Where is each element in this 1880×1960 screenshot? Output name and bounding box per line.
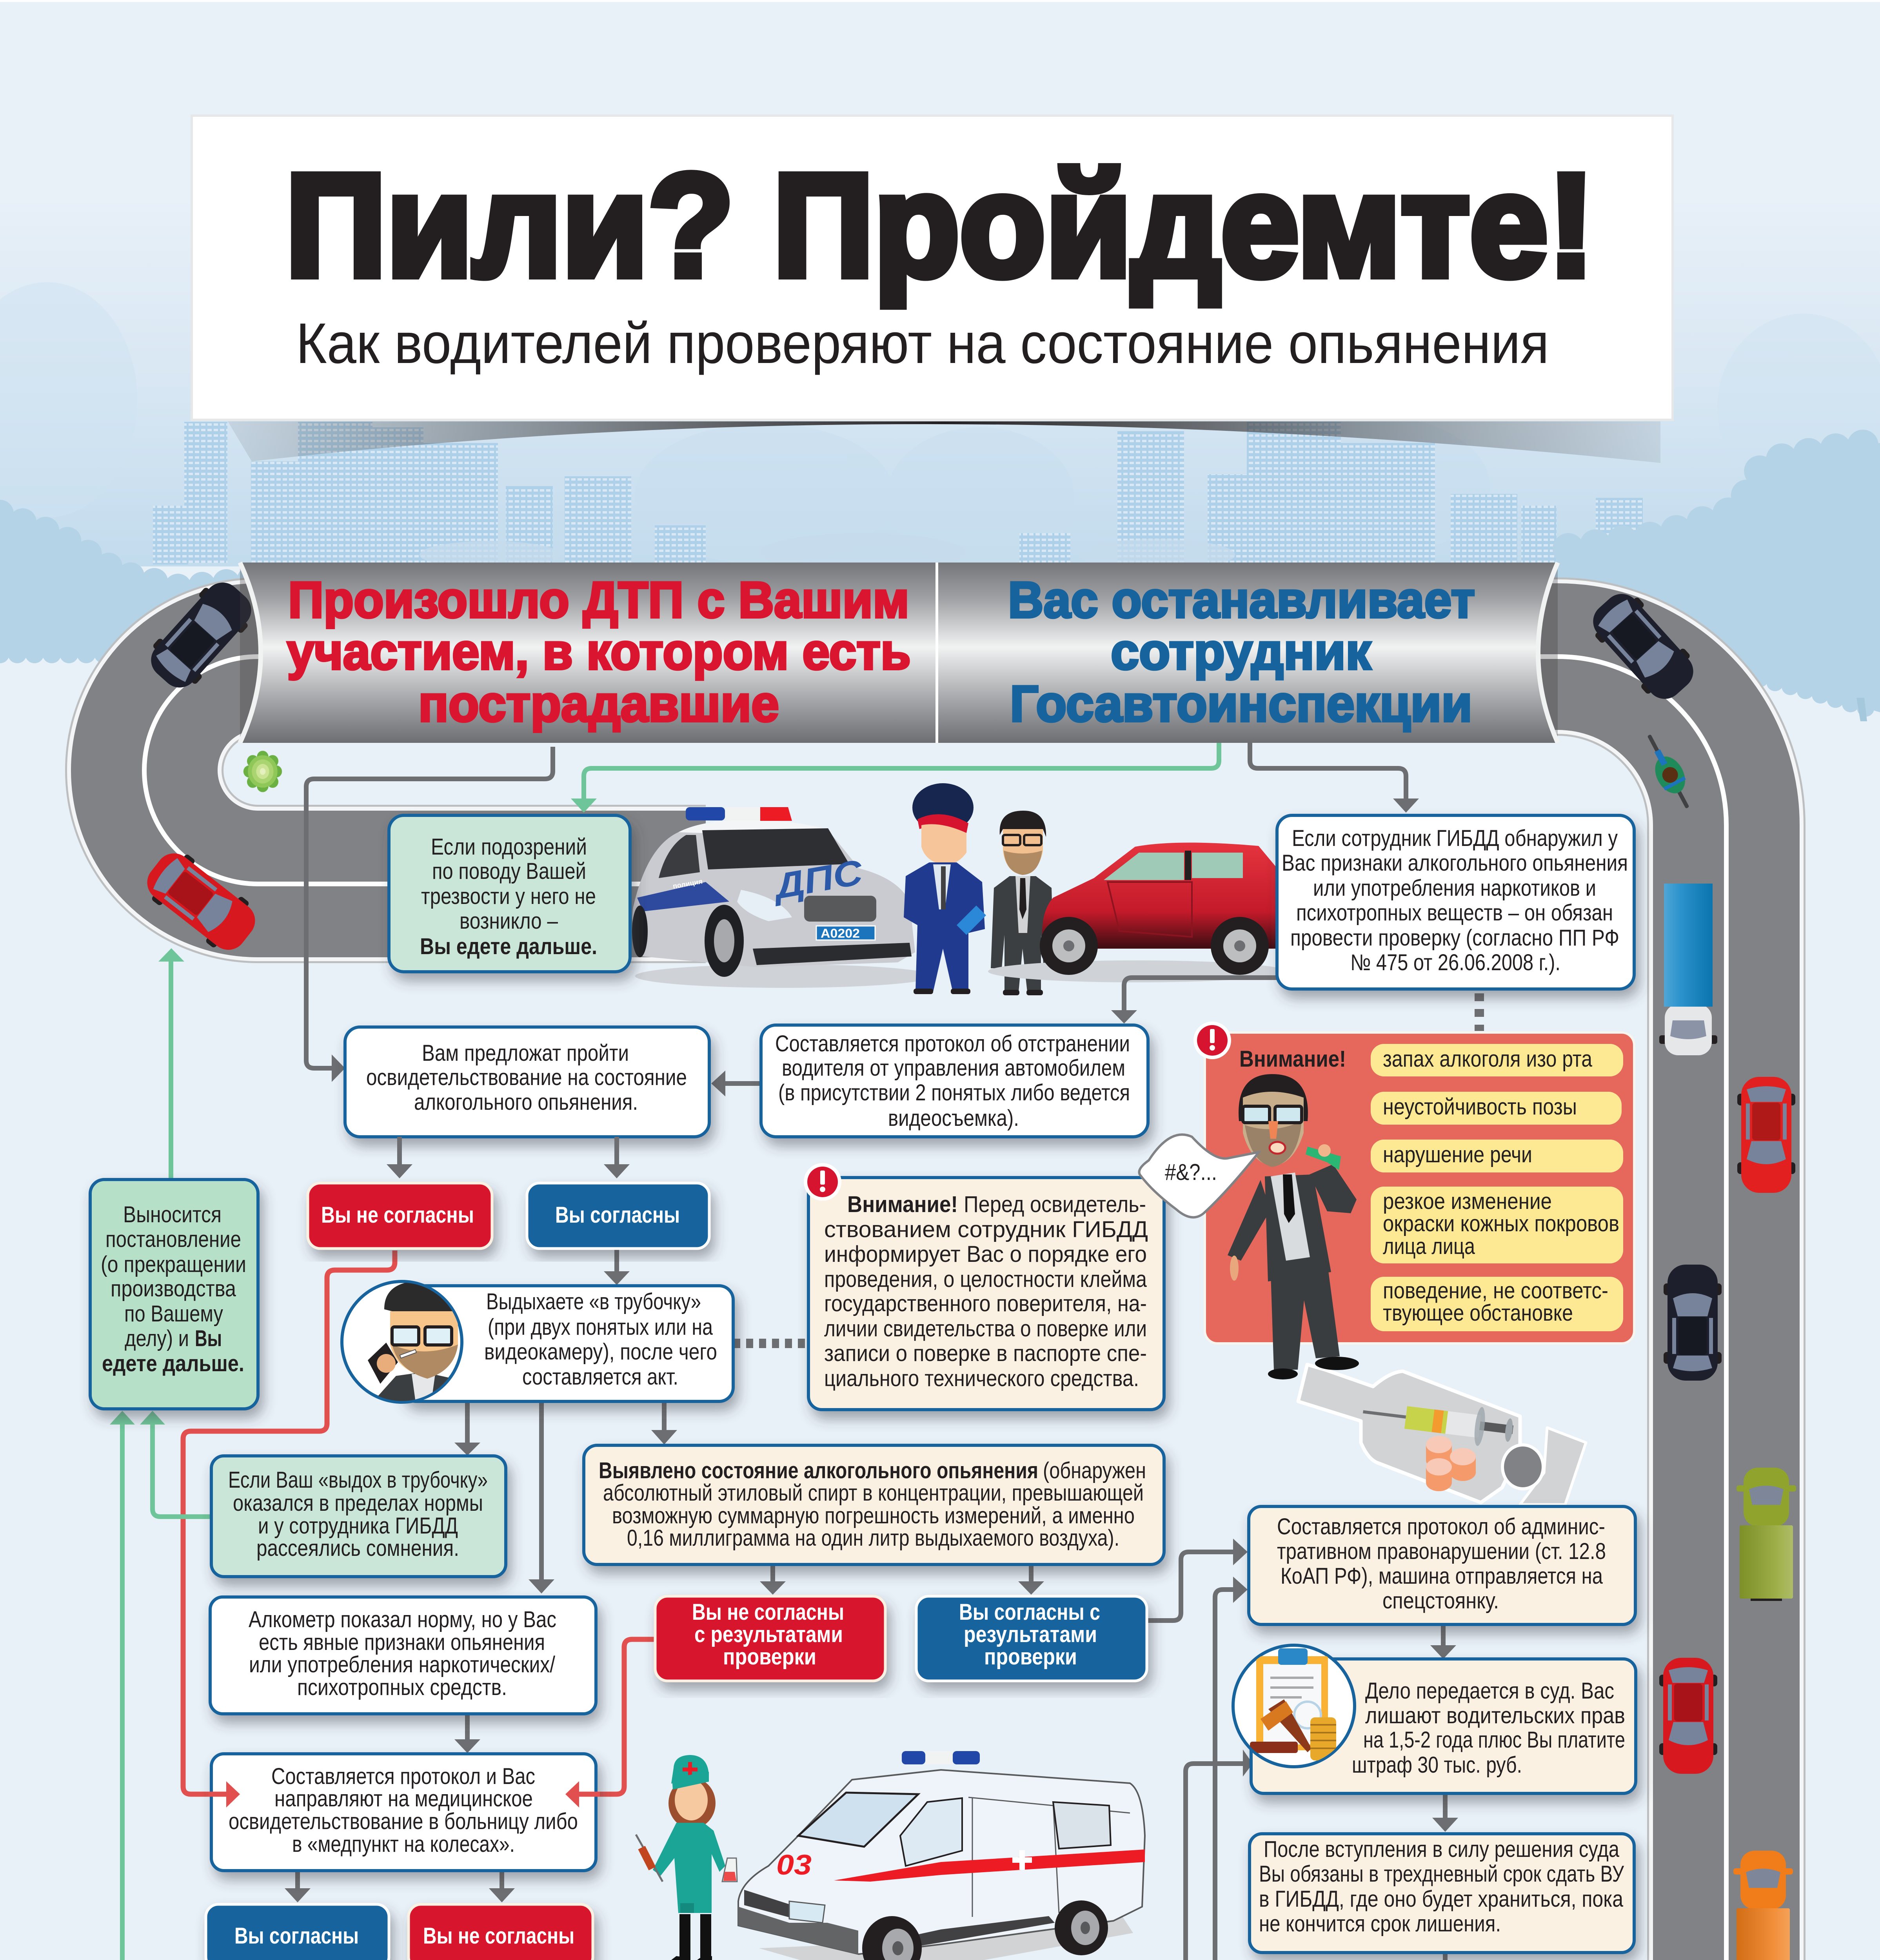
arrow: court to after decision: [1432, 1793, 1458, 1832]
arrow: refusal protocol to court: [732, 1749, 1253, 1960]
box: no suspicion: Если подозрений: [431, 834, 587, 860]
box: alcometer: Алкометр показал норму, но у Вас: [249, 1607, 556, 1632]
box: offer test: освидетельствование на состояние: [366, 1065, 687, 1090]
button: accept results: результатами: [964, 1622, 1097, 1647]
box: doubts: оказался в пределах нормы: [233, 1490, 483, 1516]
box: medical referral: [211, 1754, 596, 1871]
box: medical referral: в «медпункт на колесах».: [292, 1831, 515, 1857]
pill: posture: [1371, 1092, 1622, 1125]
arrow: detected to accept result: [1018, 1564, 1044, 1595]
box: alcometer: или употребления наркотических/: [249, 1652, 556, 1677]
box: attention before test: государственного поверителя, на-: [824, 1291, 1147, 1316]
box: offer test: алкогольного опьянения.: [414, 1089, 638, 1115]
box: attention before test: проведения, о целостности клейма: [824, 1267, 1147, 1292]
box: breath test: видеокамеру), после чего: [484, 1339, 717, 1365]
cars on road: [138, 572, 1796, 1960]
arrow: doubts to decision: [140, 1411, 211, 1517]
box: signs found: [1277, 815, 1634, 989]
box: removal protocol: водителя от управления автомобилем: [782, 1055, 1125, 1081]
illustration: bottle: [1298, 1365, 1586, 1504]
box: alcometer: есть явные признаки опьянения: [259, 1630, 545, 1655]
truck: orange: [1733, 1851, 1793, 1960]
heading: inspector stop: [1008, 571, 1475, 732]
title card: [192, 116, 1673, 420]
box: after decision: в ГИБДД, где оно будет храниться, пока: [1259, 1886, 1624, 1912]
box: removal protocol: видеосъемка).: [888, 1105, 1019, 1131]
illustration: ambulance: 03: [776, 1849, 812, 1881]
heading: accident: Произошло ДТП с Вашим: [288, 571, 909, 628]
button: refuse results: Вы не согласны: [692, 1599, 844, 1625]
arrow: inspector to no suspicion: [571, 743, 1219, 813]
box: after decision: [1250, 1834, 1634, 1953]
box: no suspicion: по поводу Вашей: [432, 858, 586, 884]
button: refuse results: проверки: [723, 1644, 816, 1670]
box: signs found: провести проверку (согласно ПП РФ: [1290, 925, 1619, 951]
icon: man with breathalyzer: [342, 1281, 463, 1402]
box: doubts: рассеялись сомнения.: [256, 1535, 459, 1561]
civilian man: [991, 811, 1054, 995]
box: no suspicion: трезвости у него не: [421, 884, 596, 909]
box: signs found: психотропных веществ – он обязан: [1296, 900, 1613, 926]
heading: inspector stop: Госавтоинспекции: [1010, 675, 1472, 732]
box: doubts: [211, 1456, 506, 1577]
pill: skin: резкое изменение: [1383, 1189, 1552, 1214]
box: court: [1233, 1645, 1636, 1793]
dotted connector: signs to attention: [1475, 993, 1484, 1031]
arrow: medical to agree: [285, 1871, 311, 1902]
arrow: disagree to medical protocol: [183, 1250, 395, 1808]
box: admin protocol: спецстоянку.: [1382, 1588, 1499, 1613]
red arrow tips over box: [208, 1781, 600, 1808]
police car: полиция: [672, 877, 703, 890]
box: after decision: не кончится срок лишения.: [1259, 1911, 1501, 1936]
button: disagree: [308, 1183, 492, 1249]
button: accept results: [916, 1596, 1147, 1681]
cyclist right: [1637, 729, 1699, 814]
button: agree: Вы согласны: [555, 1202, 680, 1228]
button: agree: [527, 1183, 709, 1249]
box: doubts: Если Ваш «выдох в трубочку»: [228, 1467, 488, 1493]
box: attention before test: Перед освидетель-: [964, 1192, 1146, 1217]
box: breath test: [342, 1281, 733, 1402]
box: removal protocol: (в присутствии 2 понятых либо ведется: [778, 1080, 1130, 1105]
car: red lane right: [1737, 1077, 1795, 1193]
box: court: лишают водительских прав: [1365, 1703, 1625, 1728]
box: no suspicion: Вы едете дальше.: [420, 934, 597, 959]
box: intoxication detected: возможную суммарную погрешность измерений, а именно: [612, 1503, 1135, 1528]
police car: А0202: [821, 926, 860, 940]
button: refuse results: [655, 1596, 885, 1681]
trees left: [0, 514, 251, 655]
box: attention before test: записи о поверке в паспорте спе-: [824, 1341, 1147, 1366]
title card shadow: [228, 421, 1660, 463]
car: red lane left: [1659, 1658, 1717, 1774]
box: medical referral: Составляется протокол и Вас: [271, 1764, 535, 1789]
box: offer test: [345, 1027, 709, 1137]
illustration: nurse: [636, 1755, 737, 1960]
arrow: breath to detected: [651, 1401, 677, 1445]
button: accept results: Вы согласны с: [959, 1599, 1100, 1625]
panel: signs of intoxication: Внимание!: [1239, 1046, 1346, 1072]
heading: accident: участием, в котором есть: [287, 623, 911, 680]
police car: ДПС: [768, 853, 866, 907]
pills: [1426, 1436, 1476, 1491]
pill: skin: [1371, 1187, 1623, 1263]
box: court: Дело передается в суд. Вас: [1365, 1678, 1614, 1704]
heading: accident: пострадавшие: [418, 675, 779, 732]
tube header: [240, 563, 1558, 743]
car: dark top left: [141, 572, 262, 698]
clouds and skyline: [0, 282, 1880, 572]
arrow: protocol to offer: [711, 1071, 761, 1096]
heading: accident: [287, 571, 911, 732]
box: attention before test: личии свидетельства о поверке или: [824, 1316, 1147, 1341]
box: court: на 1,5-2 года плюс Вы платите: [1363, 1727, 1625, 1753]
button: disagree medical: Вы не согласны: [423, 1923, 574, 1949]
speech bubble: [1139, 1134, 1259, 1217]
box: decision: Выносится: [123, 1202, 222, 1227]
box: offer test: Вам предложат пройти: [422, 1040, 629, 1066]
box: admin protocol: тративном правонарушении (ст. 12.8: [1277, 1539, 1606, 1564]
pill: behaviour: твующее обстановке: [1383, 1300, 1573, 1326]
road: [144, 657, 1726, 1960]
arrow: admin protocol to court: [1430, 1624, 1456, 1659]
car: red left: [138, 843, 265, 960]
arrow: agree to breath: [604, 1249, 630, 1285]
box: decision: (о прекращении: [101, 1252, 246, 1277]
box: attention before test: циального технического средства.: [824, 1366, 1139, 1391]
arrow: breath to alcometer: [529, 1401, 554, 1593]
arrow: alcometer to medical: [454, 1714, 480, 1753]
truck: green: [1737, 1468, 1796, 1601]
arrow: retest refusal to medical protocol: [565, 1639, 654, 1808]
pill: smell: запах алкоголя изо рта: [1383, 1046, 1593, 1072]
box: no suspicion: возникло –: [460, 908, 558, 934]
arrow: med result to admin protocol: [576, 1577, 1248, 1960]
box: court: штраф 30 тыс. руб.: [1352, 1752, 1522, 1778]
button: disagree: Вы не согласны: [321, 1202, 474, 1228]
arrow: decision to road (green up): [158, 948, 184, 1180]
panel: signs of intoxication: [1193, 1022, 1634, 1343]
box: attention before test: информирует Вас о порядке его: [824, 1241, 1147, 1267]
box: doubts: и у сотрудника ГИБДД: [258, 1513, 458, 1539]
icon: exclamation: [1193, 1022, 1231, 1059]
box: decision: едете дальше.: [102, 1351, 244, 1376]
box: decision: Вы: [195, 1326, 222, 1351]
arrow: signs to protocol: [1111, 978, 1277, 1024]
pill: behaviour: [1371, 1277, 1623, 1331]
button: refuse results: с результатами: [694, 1622, 843, 1647]
arrow: offer to agree: [604, 1137, 630, 1178]
box: signs found: Вас признаки алкогольного опьянения: [1282, 850, 1628, 876]
button: agree medical: Вы согласны: [234, 1923, 359, 1949]
trees right: [1553, 443, 1880, 721]
box: alcometer: психотропных средств.: [297, 1675, 507, 1700]
police car: [632, 807, 933, 988]
box: after decision: Вы обязаны в трехдневный срок сдать ВУ: [1259, 1861, 1624, 1887]
heading: inspector stop: Вас останавливает: [1008, 571, 1475, 628]
arrow: breath to norm: [454, 1401, 480, 1455]
arrow: norm check to decision: [110, 1411, 135, 1960]
box: admin protocol: КоАП РФ), машина отправляется на: [1281, 1563, 1603, 1589]
box: decision: производства: [111, 1276, 236, 1301]
box: intoxication detected: 0,16 миллиграмма на один литр выдыхаемого воздуха).: [627, 1525, 1119, 1551]
box: intoxication detected: (обнаружен: [1043, 1458, 1146, 1483]
box: medical referral: направляют на медицинское: [274, 1786, 533, 1811]
box: intoxication detected: Выявлено состояние алкогольного опьянения: [599, 1458, 1038, 1483]
speech bubble: #&?...: [1165, 1160, 1217, 1185]
box: signs found: Если сотрудник ГИБДД обнаружил у: [1292, 826, 1618, 851]
box: decision: постановление: [105, 1227, 241, 1252]
pill: skin: лица лица: [1383, 1234, 1475, 1259]
pill: speech: [1371, 1140, 1623, 1172]
syringe: [1361, 1393, 1515, 1450]
arrow: offer to disagree: [387, 1137, 412, 1178]
illustration: drunk man: [1228, 1074, 1359, 1379]
subtitle: Как водителей проверяют на состояние опьянения: [296, 311, 1549, 375]
box: decision: делу) и: [125, 1326, 189, 1351]
arrow: inspector to signs: [1250, 743, 1419, 813]
box: attention before test: ствованием сотрудник ГИБДД: [824, 1217, 1148, 1242]
title: Пили? Пройдемте!: [285, 143, 1595, 307]
heading: inspector stop: сотрудник: [1111, 623, 1371, 680]
box: no suspicion: [389, 815, 630, 972]
button: agree medical: [206, 1904, 389, 1960]
box: admin protocol: Составляется протокол об админис-: [1277, 1514, 1605, 1539]
pill: speech: нарушение речи: [1383, 1142, 1532, 1167]
pill: skin: окраски кожных покровов: [1383, 1211, 1619, 1236]
car: dark top right: [1583, 584, 1704, 709]
arrow: accident to offer: [306, 747, 553, 1082]
icon: exclamation: [804, 1163, 841, 1201]
button: disagree medical: [409, 1904, 593, 1960]
pill: posture: неустойчивость позы: [1383, 1094, 1577, 1120]
box: decision: [90, 1180, 258, 1409]
truck: blue vertical: [1659, 884, 1717, 1055]
dotted connector: breath to attention: [733, 1339, 807, 1348]
small bushes: [243, 751, 1025, 1960]
box: intoxication detected: абсолютный этиловый спирт в концентрации, превышающей: [603, 1480, 1144, 1506]
arrow: medical to disagree: [489, 1871, 515, 1902]
box: after decision: После вступления в силу решения суда: [1264, 1837, 1620, 1862]
button: accept results: проверки: [984, 1644, 1077, 1670]
arrow: accept result to admin protocol: [1148, 1539, 1248, 1621]
box: attention before test: [804, 1163, 1164, 1410]
officer: [904, 783, 986, 994]
arrow: after decision to retake: [1432, 1953, 1458, 1960]
icon: court documents: [1233, 1645, 1355, 1767]
car: dark lane left: [1664, 1265, 1722, 1381]
box: breath test: Выдыхаете «в трубочку»: [486, 1289, 701, 1314]
box: admin protocol: [1249, 1506, 1635, 1624]
box: signs found: № 475 от 26.06.2008 г.).: [1350, 950, 1560, 975]
box: breath test: (при двух понятых или на: [488, 1314, 713, 1340]
illustration: ambulance: [738, 1751, 1145, 1960]
box: breath test: составляется акт.: [522, 1364, 678, 1390]
box: signs found: или употребления наркотиков и: [1313, 875, 1596, 901]
box: medical referral: освидетельствование в больницу либо: [229, 1809, 578, 1834]
box: decision: по Вашему: [124, 1301, 223, 1327]
box: removal protocol: [761, 1025, 1148, 1137]
box: removal protocol: Составляется протокол об отстранении: [775, 1031, 1130, 1056]
box: alcometer: [210, 1597, 596, 1714]
box: attention before test: Внимание!: [847, 1192, 958, 1217]
arrow: detected to refuse result: [760, 1564, 786, 1595]
box: intoxication detected: [584, 1445, 1164, 1564]
pill: behaviour: поведение, не соответс-: [1383, 1278, 1608, 1303]
red car: [988, 842, 1286, 982]
